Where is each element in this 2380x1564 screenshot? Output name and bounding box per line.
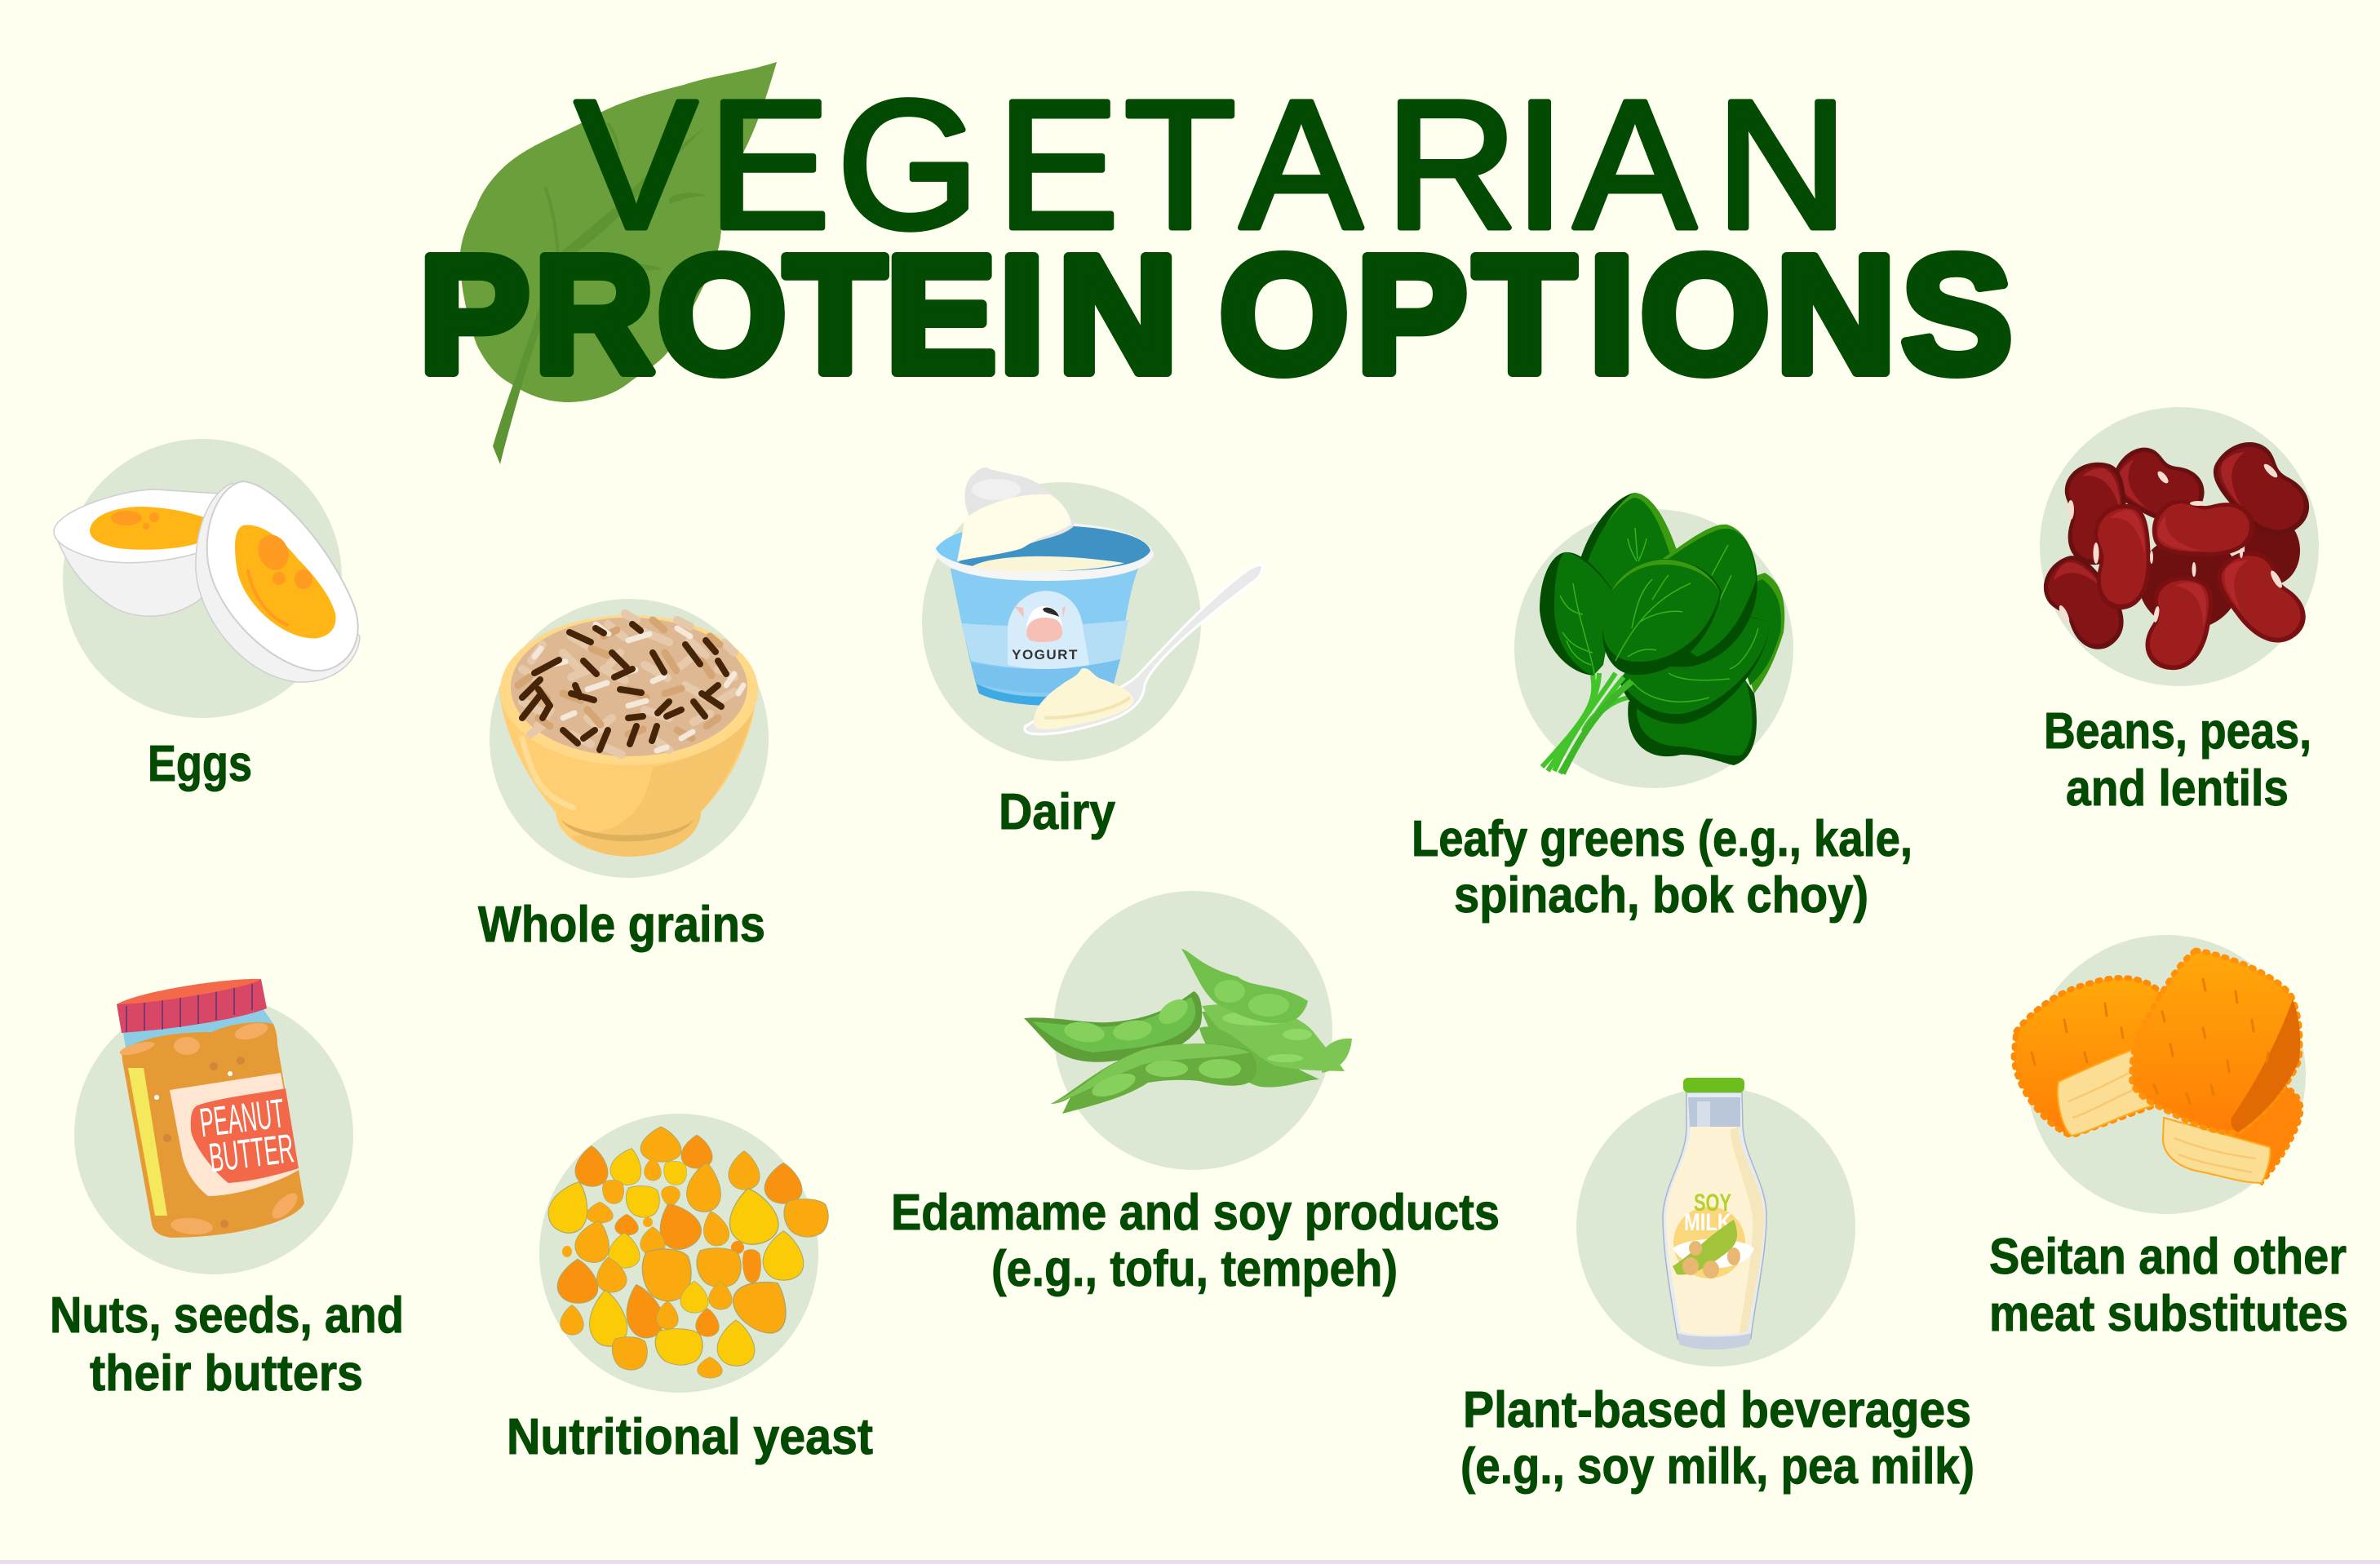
icon background: edamame	[1053, 891, 1332, 1170]
label: Edamame and soy products	[891, 1185, 1500, 1297]
label: Leafy greens	[1412, 811, 1912, 924]
icon: soy milk bottle: SOY	[1694, 1190, 1731, 1216]
panel: dairy	[922, 467, 1263, 840]
icon: spinach bunch	[1540, 493, 1784, 773]
label: Beans, peas, and lentils: and lentils	[2066, 760, 2289, 817]
panel: leafy greens	[1412, 493, 1912, 924]
icon: peanut butter jar	[117, 979, 304, 1238]
panel: edamame	[891, 891, 1500, 1297]
icon: yogurt cup with spoon: YOGURT	[1012, 647, 1079, 662]
label: Leafy greens: spinach, bok choy)	[1454, 867, 1868, 924]
icon: soy milk bottle: MILK	[1684, 1209, 1731, 1236]
label: Nuts, seeds, and their butters: their butters	[90, 1345, 363, 1402]
icon background: whole grains	[490, 599, 769, 878]
title: PROTEIN OPTIONS: PROTEIN OPTIONS	[419, 221, 2013, 408]
icon background: beans	[2040, 407, 2319, 686]
label: Edamame and soy products: Edamame and soy products	[891, 1185, 1500, 1241]
icon: seitan pieces	[2014, 950, 2302, 1183]
label: Leafy greens: Leafy greens (e.g., kale,	[1412, 811, 1912, 867]
panel: plant-based beverages	[1460, 1078, 1974, 1495]
panel: seitan	[1989, 935, 2348, 1342]
label: Beans, peas, and lentils: Beans, peas,	[2044, 703, 2311, 760]
label: Dairy: Dairy	[999, 784, 1115, 840]
panel: eggs	[54, 439, 360, 792]
panel: nutritional yeast	[507, 1114, 873, 1465]
icon: peanut butter jar: PEANUT	[197, 1090, 287, 1145]
icon: yogurt cup with spoon	[934, 467, 1263, 734]
panel: whole grains	[478, 599, 769, 953]
icon: bowl of wild rice	[499, 614, 758, 857]
label: Nutritional yeast: Nutritional yeast	[507, 1409, 873, 1465]
label: Plant-based beverages	[1460, 1382, 1974, 1495]
icon: edamame pods	[1024, 949, 1352, 1114]
icon background: nutritional yeast	[539, 1114, 818, 1393]
label: Seitan and other meat substitutes: Seitan and other	[1989, 1229, 2347, 1285]
label: Whole grains: Whole grains	[478, 897, 765, 953]
icon: kidney beans	[2032, 429, 2323, 677]
label: Nuts, seeds, and their butters: Nuts, seeds, and	[50, 1287, 404, 1344]
label: Seitan and other meat substitutes: meat substitutes	[1989, 1286, 2348, 1342]
jar lid	[117, 979, 267, 1033]
icon: soy milk bottle	[1663, 1078, 1766, 1349]
icon background: leafy greens	[1514, 509, 1793, 788]
label: Eggs: Eggs	[148, 736, 252, 792]
label: Plant-based beverages: (e.g., soy milk, pea milk)	[1460, 1438, 1974, 1495]
icon: yeast flakes	[543, 1127, 828, 1378]
icon: green leaf behind title	[460, 62, 777, 464]
icon background: plant-based beverages	[1576, 1088, 1855, 1367]
icon background: seitan	[2027, 935, 2306, 1214]
label: Nuts, seeds, and their butters	[50, 1287, 404, 1402]
label: Plant-based beverages: Plant-based beverages	[1463, 1382, 1971, 1438]
label: Beans, peas, and lentils	[2044, 703, 2311, 817]
panel: beans	[2032, 407, 2323, 817]
label: Edamame and soy products: (e.g., tofu, tempeh)	[991, 1241, 1398, 1297]
icon background: nuts	[74, 995, 353, 1274]
icon background: eggs	[63, 439, 342, 718]
panel: nuts and seeds	[50, 979, 404, 1402]
icon: halved boiled eggs	[54, 481, 360, 682]
label: Seitan and other meat substitutes	[1989, 1229, 2348, 1342]
title: VEGETARIAN: VEGETARIAN	[575, 63, 1848, 267]
icon: peanut butter jar: BUTTER	[206, 1125, 296, 1181]
icon background: dairy	[922, 482, 1201, 761]
